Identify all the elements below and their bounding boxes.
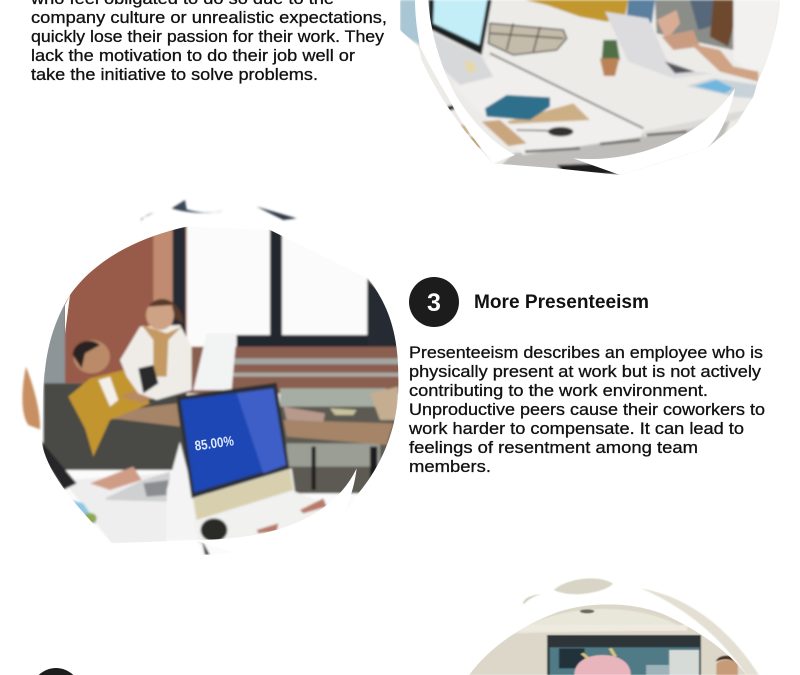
photo: team meeting around office table bbox=[10, 190, 410, 560]
text block: disengagement paragraph: company culture or unrealistic expectations, bbox=[31, 8, 387, 27]
text block: presenteeism description: feelings of resentment among team bbox=[409, 438, 698, 457]
number badge: 3 bbox=[409, 277, 459, 327]
text block: disengagement paragraph bbox=[30, 0, 387, 84]
text block: disengagement paragraph: quickly lose their passion for their work. They bbox=[31, 27, 385, 46]
text block: disengagement paragraph: lack the motivation to do their job well or bbox=[31, 46, 355, 65]
number badge: 4 (cut off by page edge) bbox=[39, 668, 73, 675]
text block: presenteeism description: physically present at work but is not actively bbox=[409, 362, 762, 381]
text block: disengagement paragraph: take the initiative to solve problems. bbox=[31, 65, 318, 84]
photo: presentation room with wall screen bbox=[462, 578, 759, 675]
text block: presenteeism description: Unproductive peers cause their coworkers to bbox=[409, 400, 765, 419]
heading: More Presenteeism: More Presenteeism bbox=[474, 292, 649, 313]
text block: presenteeism description: contributing to the work environment. bbox=[409, 381, 708, 400]
white swoosh cut bbox=[415, 0, 515, 163]
text block: presenteeism description: work harder to compensate. It can lead to bbox=[408, 419, 744, 438]
text block: presenteeism description: Presenteeism describes an employee who is bbox=[409, 343, 763, 362]
monitor screen figure: 85.00% bbox=[194, 432, 235, 454]
number badge: 3: 3 bbox=[427, 289, 441, 317]
fragments: photo slivers bbox=[22, 200, 297, 429]
text block: presenteeism description: members. bbox=[409, 457, 491, 476]
fragments: ceiling slivers bbox=[523, 578, 759, 675]
text block: presenteeism description bbox=[408, 343, 765, 476]
white swoosh cut bbox=[195, 468, 357, 555]
photo: office desk with laptop and plant bbox=[400, 0, 800, 180]
